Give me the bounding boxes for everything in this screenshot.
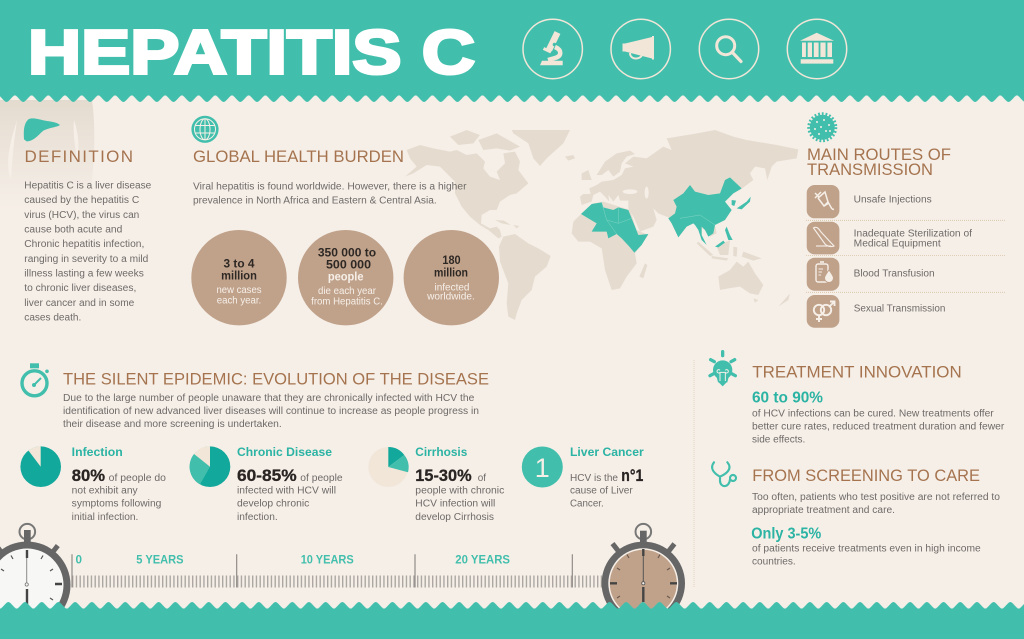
- stat: new cases: million: [221, 271, 257, 283]
- icon: globe: [191, 116, 219, 143]
- screening text: appropriate treatment and care.: [752, 505, 895, 516]
- definition text: illness lasting a few weeks: [24, 268, 144, 280]
- stat: new cases: 3 to 4: [224, 258, 255, 270]
- stage: infection: initial infection.: [72, 512, 138, 523]
- route: inadequate sterilization: Medical Equipment: [854, 238, 941, 249]
- route: unsafe injections: Unsafe Injections: [854, 194, 932, 205]
- stat: infected worldwide: [404, 230, 499, 325]
- stage: liver cancer: [522, 445, 644, 510]
- definition text: Hepatitis C is a liver disease: [24, 180, 152, 192]
- stage: chronic disease: develop chronic: [237, 499, 309, 510]
- stage: chronic disease: infection.: [237, 512, 278, 523]
- route: inadequate sterilization: [807, 222, 972, 254]
- stage: cirrhosis: of: [478, 473, 486, 484]
- patients text: [752, 544, 981, 568]
- stage: cirrhosis: people with chronic: [415, 486, 504, 497]
- definition text: cause both acute and: [24, 224, 122, 236]
- badge: number 1: 1: [535, 453, 550, 483]
- route: inadequate sterilization: Inadequate Sterilization of: [854, 228, 972, 239]
- timeline: [72, 554, 602, 588]
- stage: infection: Infection: [72, 445, 123, 459]
- intro paragraph: Due to the large number of people unaware that they are chronically infected with HCV the: [63, 393, 475, 404]
- definition text: Chronic hepatitis infection,: [24, 239, 144, 250]
- heading: silent epidemic: THE SILENT EPIDEMIC: EVOLUTION OF THE DISEASE: [63, 369, 489, 388]
- stage: cirrhosis: [368, 445, 504, 523]
- stat: infected worldwide: million: [434, 267, 468, 279]
- timeline: 10 YEARS: [301, 554, 354, 566]
- panel: main routes of transmission: [806, 114, 1005, 328]
- stage: infection: symptoms following: [72, 499, 161, 510]
- intro text: [193, 181, 467, 206]
- intro text: prevalence in North Africa and Eastern & Central Asia.: [193, 195, 437, 206]
- treatment text: side effects.: [752, 434, 805, 445]
- icon: institution: [787, 19, 847, 79]
- stage: infection: of people do: [109, 473, 166, 484]
- stage: cirrhosis: Cirrhosis: [415, 445, 468, 459]
- stage: liver cancer: Liver Cancer: [570, 445, 644, 459]
- icon: magnifier: [699, 19, 759, 79]
- panel: from screening to care: [712, 462, 1000, 568]
- stage: chronic disease: of people: [300, 473, 343, 484]
- icon: liver: [24, 118, 60, 141]
- route: blood transfusion: [807, 258, 935, 291]
- stage: chronic disease: [190, 445, 343, 523]
- stage: infection: 80%: [72, 466, 105, 485]
- stat: deaths: 500 000: [326, 259, 371, 271]
- stat: new cases: new cases: [216, 285, 262, 296]
- intro text: Viral hepatitis is found worldwide. However, there is a higher: [193, 181, 467, 192]
- stage: chronic disease: 60-85%: [237, 466, 297, 485]
- stat: deaths: [298, 230, 393, 325]
- treatment text: better cure rates, reduced treatment duration and fewer: [752, 421, 1005, 432]
- stage: liver cancer: cause of Liver: [570, 486, 633, 497]
- icon: left stopwatch: [0, 524, 70, 628]
- panel: global health burden: [191, 116, 499, 325]
- stat: only 3-5%: Only 3-5%: [751, 525, 821, 542]
- stage: liver cancer: Cancer.: [570, 499, 604, 510]
- stage: liver cancer: HCV is the: [570, 473, 618, 484]
- definition text: ranging in severity to a mild: [24, 254, 148, 265]
- stage: chronic disease: Chronic Disease: [237, 445, 332, 459]
- background: body silhouette: [0, 100, 94, 210]
- heading: main routes: [807, 145, 951, 179]
- panel: the silent epidemic: [20, 363, 644, 523]
- stage: chronic disease: infected with HCV will: [237, 486, 336, 497]
- screening text: [752, 492, 1000, 516]
- pie chart: 80%: [20, 446, 61, 487]
- panel: treatment innovation: [710, 352, 1005, 445]
- icon: megaphone: [611, 19, 670, 79]
- intro paragraph: [63, 393, 479, 430]
- intro paragraph: identification of new advanced liver diseases will continue to increase as people progress in: [63, 406, 479, 417]
- screening text: Too often, patients who test positive are not referred to: [752, 492, 1000, 503]
- heading: treatment innovation: TREATMENT INNOVATION: [752, 363, 962, 382]
- icon: virus: [809, 114, 836, 141]
- route: blood transfusion: Blood Transfusion: [854, 268, 935, 279]
- stage: cirrhosis: HCV infection will: [415, 499, 495, 510]
- world map: [405, 130, 798, 320]
- heading: main routes: TRANSMISSION: [807, 160, 933, 179]
- stat: deaths: die each year: [318, 286, 377, 297]
- patients text: countries.: [752, 557, 796, 568]
- intro paragraph: their disease and more screening is undertaken.: [63, 419, 282, 430]
- stat: new cases: each year.: [217, 296, 261, 307]
- route: sexual transmission: [807, 295, 945, 328]
- stage: infection: [20, 445, 166, 523]
- icon: stethoscope: [712, 462, 736, 486]
- stage: cirrhosis: develop Cirrhosis: [415, 512, 494, 523]
- heading: main routes: MAIN ROUTES OF: [807, 145, 951, 164]
- icon: microscope: [523, 19, 582, 79]
- patients text: of patients receive treatments even in high income: [752, 544, 981, 555]
- definition text: liver cancer and in some: [24, 298, 135, 309]
- pie chart: 60-85%: [190, 446, 230, 487]
- route: sexual transmission: Sexual Transmission: [854, 304, 945, 315]
- timeline: 0: [76, 554, 82, 566]
- stage: cirrhosis: 15-30%: [415, 466, 472, 485]
- definition text: [24, 180, 152, 324]
- stat: infected worldwide: 180: [442, 255, 461, 267]
- timeline: 20 YEARS: [455, 554, 510, 566]
- stat: deaths: 350 000 to: [318, 247, 376, 259]
- timeline: 5 YEARS: [136, 554, 184, 566]
- stat: deaths: people: [328, 272, 364, 284]
- icon: light bulb: [710, 352, 735, 386]
- header band: [0, 0, 1024, 102]
- treatment text: of HCV infections can be cured. New treatments offer: [752, 408, 994, 419]
- heading: global health burden: GLOBAL HEALTH BURDEN: [193, 147, 404, 166]
- stat: 60 to 90%: 60 to 90%: [752, 389, 823, 406]
- definition text: caused by the hepatitis C: [24, 195, 139, 206]
- definition text: virus (HCV), the virus can: [24, 210, 139, 221]
- heading: definition: DEFINITION: [24, 147, 133, 166]
- title: HEPATITIS C: [28, 18, 475, 88]
- stat: deaths: from Hepatitis C.: [311, 296, 383, 307]
- icon: right stopwatch: [602, 524, 685, 625]
- stat: infected worldwide: infected: [434, 282, 470, 293]
- stat: infected worldwide: worldwide.: [426, 292, 475, 303]
- definition text: cases death.: [24, 312, 81, 324]
- stat: new cases: [191, 230, 287, 325]
- heading: from screening to care: FROM SCREENING TO CARE: [752, 466, 980, 485]
- stage: infection: not exhibit any: [72, 486, 138, 497]
- panel: definition: [24, 118, 152, 323]
- stage: liver cancer: n°1: [621, 466, 643, 485]
- definition text: to chronic liver diseases,: [24, 283, 136, 294]
- route: unsafe injections: [807, 185, 932, 218]
- icon: stopwatch: [22, 363, 49, 396]
- treatment text: [752, 408, 1005, 445]
- footer band: [0, 602, 1024, 639]
- pie chart: 15-30%: [368, 447, 409, 487]
